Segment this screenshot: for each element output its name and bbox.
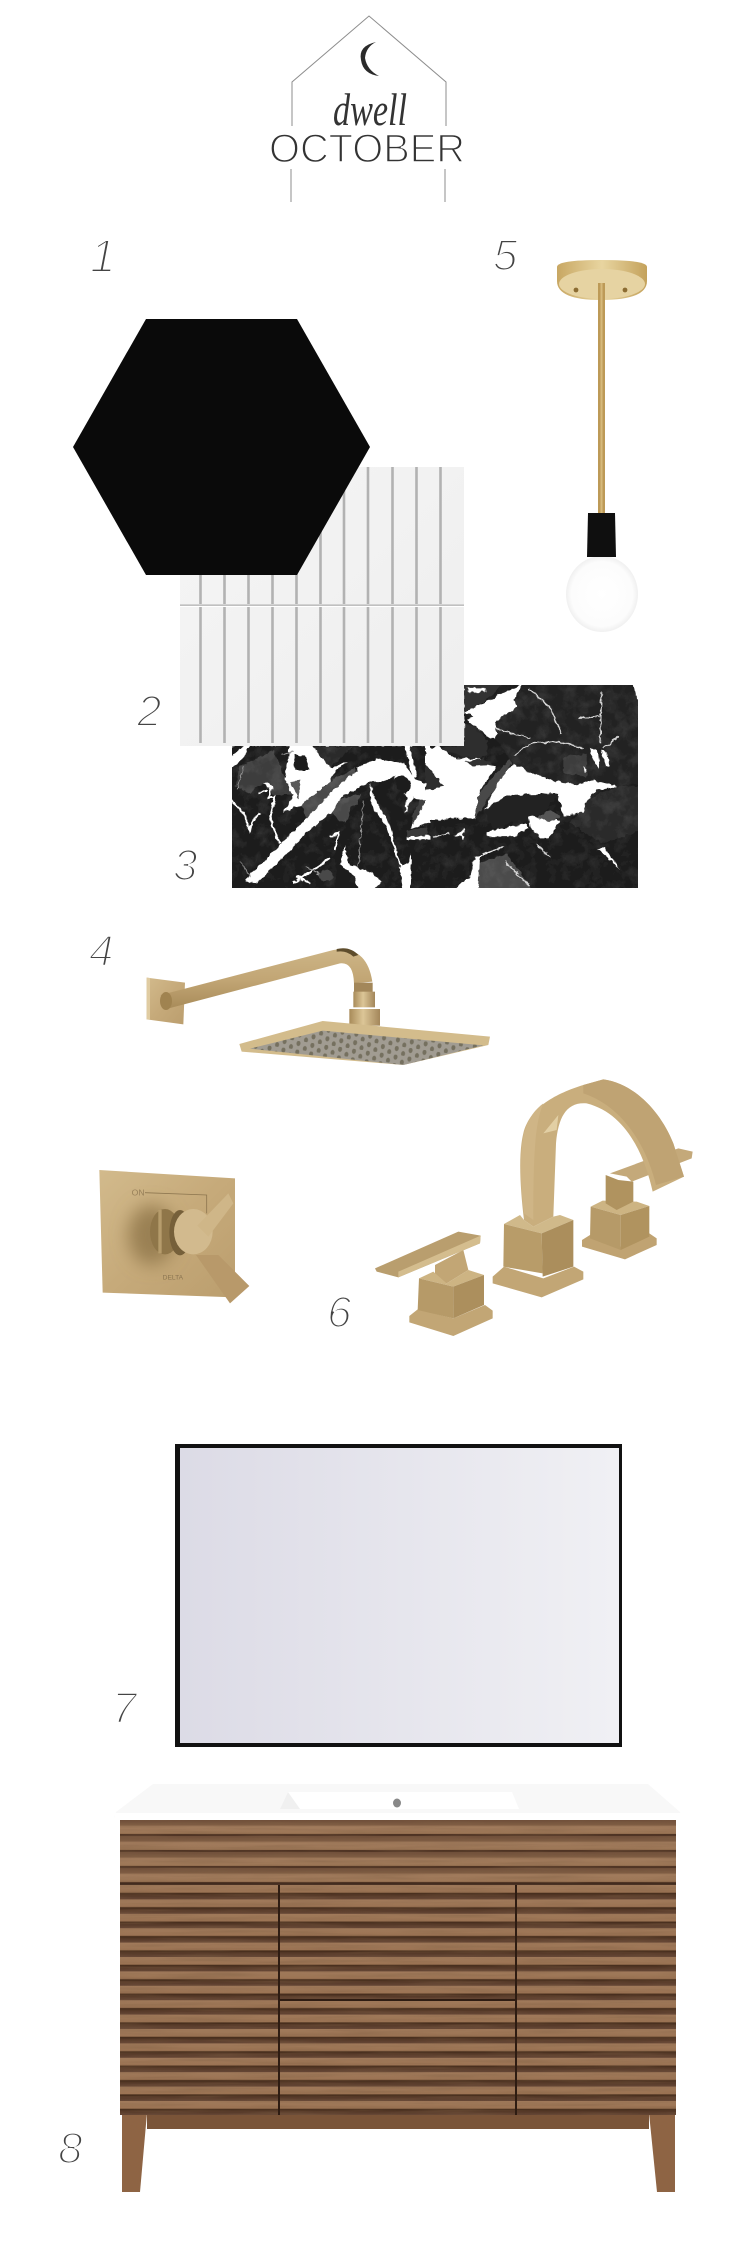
valve knob bbox=[150, 1209, 180, 1254]
product 4: shower valve trim bbox=[99, 1170, 249, 1303]
marble left half bbox=[232, 746, 431, 888]
shower collar bbox=[354, 983, 373, 992]
product 4: shower head and arm bbox=[147, 948, 490, 1065]
number 4: 4 bbox=[89, 927, 113, 976]
lower drawer bbox=[280, 2001, 515, 2115]
logo: dwell October house mark bbox=[269, 16, 465, 202]
product 8: walnut slatted vanity bbox=[115, 1784, 681, 2192]
shower head bbox=[239, 1021, 490, 1065]
number 2: 2 bbox=[136, 687, 161, 736]
valve brand mark: DELTA bbox=[163, 1274, 184, 1281]
upper lever bbox=[197, 1193, 233, 1237]
product 5: brass pendant light bbox=[557, 260, 647, 632]
right handle bbox=[582, 1148, 693, 1259]
lower lever bbox=[196, 1255, 249, 1303]
number 3: 3 bbox=[173, 841, 198, 890]
number 8: 8 bbox=[58, 2124, 83, 2173]
number 5: 5 bbox=[493, 231, 518, 280]
number 6: 6 bbox=[327, 1288, 352, 1337]
upper drawer bbox=[280, 1885, 515, 1999]
valve text: ON bbox=[132, 1187, 145, 1197]
product 2: white stacked mosaic tile bbox=[180, 467, 464, 746]
house outline bbox=[291, 16, 446, 202]
lamp bulb bbox=[566, 556, 638, 632]
number 1: 1 bbox=[90, 230, 116, 282]
left handle bbox=[375, 1232, 493, 1336]
logo wordmark: October: OCTOBER bbox=[269, 127, 465, 171]
product 6: widespread faucet bbox=[375, 1079, 693, 1336]
icon: crescent moon bbox=[361, 42, 379, 76]
vanity countertop and sink bbox=[115, 1784, 681, 1820]
marble right half bbox=[425, 682, 643, 893]
vanity legs bbox=[122, 2113, 147, 2192]
lamp socket bbox=[587, 513, 616, 557]
right door bbox=[517, 1885, 676, 2115]
vanity body top bbox=[120, 1820, 676, 1885]
number 7: 7 bbox=[112, 1684, 138, 1733]
wall flange bbox=[147, 978, 185, 1024]
spout bbox=[493, 1079, 684, 1297]
product 3: black and white marble slab bbox=[227, 682, 643, 893]
lamp canopy bbox=[557, 260, 647, 300]
lamp stem bbox=[598, 283, 605, 515]
valve plate bbox=[99, 1170, 235, 1297]
logo script: dwell: dwell bbox=[333, 84, 407, 135]
shower arm bbox=[161, 949, 372, 1009]
product 7: black framed mirror bbox=[175, 1444, 622, 1747]
product 1: black hexagon tile bbox=[73, 319, 370, 575]
left door bbox=[120, 1885, 278, 2115]
